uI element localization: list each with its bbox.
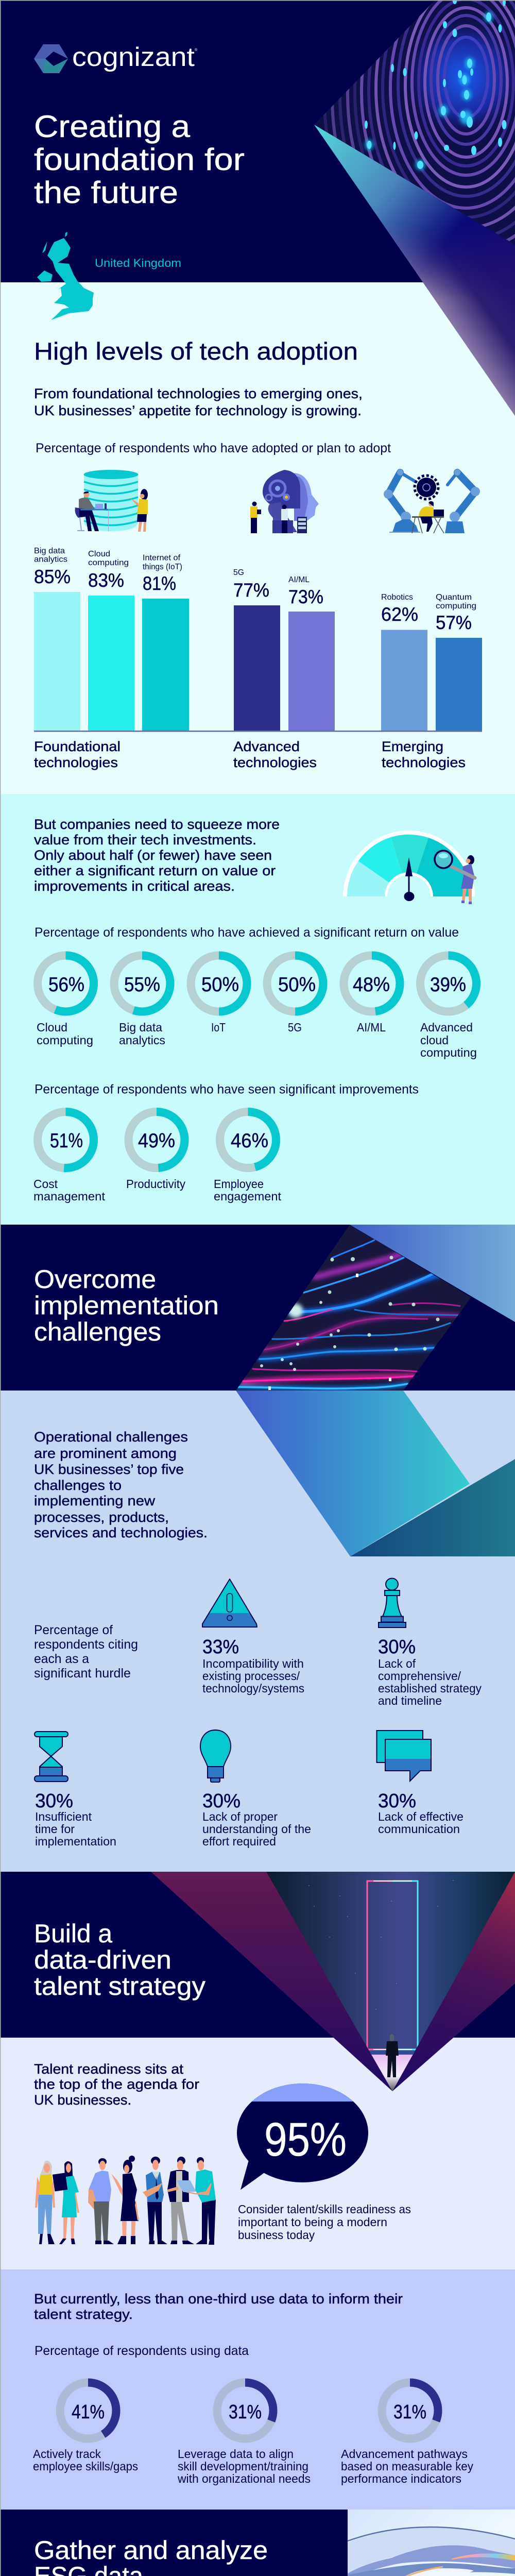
bar: internet of things (142, 553, 189, 731)
challenge: lack of strategy: established strategy (378, 1682, 482, 1695)
hero gradient wedge (314, 125, 515, 416)
text block: challenges intro: services and technologies. (34, 1525, 208, 1540)
shapes: upper blue wedge (350, 1225, 515, 1322)
person 5 (142, 2157, 167, 2244)
icon: robot arms and gear (384, 469, 480, 533)
person 7 (185, 2157, 216, 2245)
callout: 95% talent readiness (237, 2083, 411, 2242)
icon: AI head with robot arm (250, 470, 319, 533)
person 2 (53, 2161, 79, 2244)
challenge: communication: communication (378, 1822, 460, 1836)
bar: quantum computing: Quantum (436, 593, 472, 602)
bar: 5G (233, 568, 280, 731)
text block: value intro: either a significant return on value or (34, 863, 276, 878)
bar: big data analytics: analytics (34, 555, 67, 564)
donut: advanced cloud computing 39%: computing (420, 1046, 477, 1059)
challenge: understanding of effort (200, 1730, 311, 1848)
group labels (34, 739, 466, 770)
donut row: improvements (33, 1112, 282, 1203)
donut: track skills 41%: Actively track (33, 2447, 101, 2461)
donut: advanced cloud computing 39%: 39% (430, 974, 466, 996)
challenge: incompatibility: technology/systems (202, 1682, 304, 1695)
challenge: incompatibility: 33% (202, 1636, 239, 1658)
text block: value intro: But companies need to squeeze more (34, 817, 280, 832)
bar: internet of things: Internet of (143, 553, 181, 563)
logo: Cognizant (34, 42, 198, 73)
text block: talent readiness (34, 2061, 199, 2108)
hero image: swirl of glowing cables (309, 0, 515, 416)
text block: talent data intro: But currently, less than one-third use data to inform their (34, 2291, 403, 2307)
donut: track skills 41%: employee skills/gaps (33, 2460, 138, 2473)
shapes: talent wedge with neon doorway (151, 1872, 515, 2091)
heading: data-driven talent strategy (34, 1919, 205, 2001)
challenge: incompatibility: existing processes/ (202, 1669, 300, 1683)
woman with magnifier (435, 851, 475, 904)
bar: internet of things: 81% (143, 573, 176, 594)
challenge: insufficient time: 30% (35, 1790, 73, 1812)
text block: challenges intro (34, 1429, 208, 1540)
callout: 95% talent readiness: Consider talent/skills readiness as (238, 2202, 411, 2216)
challenge: insufficient time: Insufficient (35, 1810, 92, 1823)
heading: gather and analyze ESG data: Gather and analyze (34, 2536, 268, 2565)
donut: advancement pathways 31%: performance indicators (341, 2472, 461, 2485)
heading: overcome implementation challenges: implementation (34, 1291, 219, 1320)
donut: employee engagement 46%: Employee (214, 1177, 264, 1191)
donut: 5G 50% (267, 955, 323, 1034)
heading: data-driven talent strategy: Build a (34, 1919, 112, 1948)
bar: quantum computing (436, 593, 482, 731)
bar: cloud computing: Cloud (88, 550, 110, 558)
bar: robotics: 62% (381, 604, 418, 625)
challenge: understanding of effort: 30% (202, 1790, 241, 1812)
shapes: lower gradient chevron (236, 1391, 515, 1556)
donut: big data analytics 55%: 55% (124, 974, 160, 996)
donut: IoT 50% (191, 955, 247, 1034)
text block: challenges intro: implementing new (34, 1493, 156, 1509)
text block: talent readiness: Talent readiness sits at (34, 2061, 184, 2077)
icon: warning triangle (202, 1579, 257, 1627)
challenge: communication: Lack of effective (378, 1810, 464, 1823)
challenge: lack of strategy: comprehensive/ (378, 1669, 461, 1683)
person facing doorway (386, 2034, 399, 2077)
donut: big data analytics 55%: analytics (119, 1033, 165, 1047)
donut: 5G 50%: 5G (288, 1021, 302, 1034)
donut: 5G 50%: 50% (278, 974, 316, 996)
donut: cost management 51%: management (33, 1190, 106, 1203)
bar: big data analytics: Big data (34, 547, 65, 555)
title: Creating a (34, 109, 191, 144)
challenge: lack of strategy: 30% (378, 1636, 416, 1658)
bar: big data analytics (34, 547, 80, 731)
person 6 (167, 2157, 194, 2244)
logo: Cognizant: cognizant (72, 42, 195, 72)
text block: tech adoption intro: UK businesses’ appetite for technology is growing. (34, 403, 362, 418)
bar: internet of things: things (IoT) (143, 563, 182, 571)
donut: advanced cloud computing 39% (420, 955, 477, 1059)
text block: value intro: improvements in critical areas. (34, 878, 235, 894)
person 1 (35, 2161, 55, 2244)
donut: skill development 31%: with organizational needs (177, 2472, 311, 2485)
icon: chess pawn (379, 1579, 406, 1628)
text block: hurdle caption: respondents citing (34, 1637, 138, 1652)
bar: 5G: 5G (233, 568, 244, 577)
donut row: return on value (37, 955, 477, 1059)
text block: hurdle caption: each as a (34, 1652, 89, 1666)
panel: value background (0, 794, 515, 1225)
donut: advancement pathways 31%: 31% (393, 2401, 426, 2423)
challenge: communication (377, 1731, 464, 1836)
text block: challenges intro: UK businesses’ top five (34, 1462, 184, 1477)
panel: implementation header background (0, 1225, 515, 1391)
text block: value intro: value from their tech investments. (34, 832, 256, 848)
chart caption: Percentage of respondents who have adopted or plan to adopt (36, 441, 391, 455)
challenge: understanding of effort: understanding of the (202, 1822, 311, 1836)
text block: challenges intro: are prominent among (34, 1446, 177, 1461)
bar: big data analytics: 85% (34, 566, 71, 587)
donut: productivity 49%: 49% (138, 1130, 175, 1152)
donut: advancement pathways 31%: based on measurable key (341, 2460, 473, 2473)
bar: robotics (381, 593, 427, 731)
bar: cloud computing: computing (88, 558, 129, 567)
heading: gather and analyze ESG data (34, 2536, 268, 2576)
donut: cloud computing 56%: 56% (48, 974, 84, 996)
donut: advanced cloud computing 39%: cloud (420, 1033, 449, 1047)
bar: cloud computing (88, 550, 134, 731)
donut: IoT 50%: 50% (201, 974, 239, 996)
logo: Cognizant: ® (195, 48, 198, 52)
panel: challenges background (0, 1391, 515, 1872)
bar chart: technology adoption (34, 547, 482, 770)
donut: productivity 49% (126, 1112, 185, 1191)
bar: AI/ML: 73% (288, 586, 323, 607)
challenge: lack of strategy: Lack of (378, 1657, 416, 1670)
title: the future (34, 175, 178, 210)
panel: tech adoption background (0, 282, 515, 794)
donut: advancement pathways 31%: Advancement pathways (341, 2447, 468, 2461)
donut: AI/ML 48% (344, 955, 400, 1034)
callout: 95% talent readiness: important to being a modern (238, 2215, 387, 2229)
image: iridescent glass (348, 2510, 515, 2576)
group labels: Foundational (34, 739, 121, 754)
heading: data-driven talent strategy: talent strategy (34, 1972, 205, 2001)
donut row: use of talent data (33, 2382, 473, 2485)
donut: skill development 31%: skill development/training (178, 2460, 308, 2473)
donut: IoT 50%: IoT (211, 1021, 226, 1034)
chart caption: Percentage of respondents who have seen significant improvements (35, 1082, 419, 1096)
icon: UK map (37, 232, 94, 320)
challenge: incompatibility (202, 1579, 304, 1695)
icon: speech bubbles (377, 1731, 431, 1781)
text block: talent readiness: the top of the agenda for (34, 2076, 199, 2092)
donut: cost management 51% (33, 1112, 106, 1203)
donut: big data analytics 55%: Big data (119, 1021, 162, 1034)
panel: talent readiness background (0, 2038, 515, 2269)
group labels: technologies (233, 755, 317, 770)
donut: productivity 49%: Productivity (126, 1177, 185, 1191)
person 4 (111, 2156, 139, 2244)
donut: track skills 41%: 41% (72, 2401, 105, 2423)
text block: hurdle caption: significant hurdle (34, 1666, 131, 1681)
group labels: technologies (382, 755, 466, 770)
challenge: communication: 30% (378, 1790, 416, 1812)
challenge: understanding of effort: Lack of proper (202, 1810, 278, 1823)
panel: hero background (0, 0, 515, 282)
person 3 (88, 2158, 114, 2244)
donut: advancement pathways 31% (341, 2382, 473, 2485)
text block: challenges intro: processes, products, (34, 1510, 169, 1525)
donut: cost management 51%: Cost (33, 1177, 58, 1191)
donut: AI/ML 48%: 48% (353, 974, 390, 996)
bar: AI/ML (288, 575, 335, 731)
heading: tech adoption: High levels of tech adoption (34, 337, 358, 365)
chart caption: Percentage of respondents using data (35, 2344, 249, 2358)
title: foundation for (34, 142, 245, 177)
laptop (177, 2180, 196, 2192)
challenge: lack of strategy: and timeline (378, 1694, 442, 1707)
panel: ESG header background (0, 2510, 348, 2576)
challenge: insufficient time (35, 1732, 116, 1848)
chart caption: Percentage of respondents who have achieved a significant return on value (35, 925, 459, 940)
challenge: insufficient time: time for (35, 1822, 75, 1836)
heading: overcome implementation challenges: challenges (34, 1317, 161, 1346)
donut: track skills 41% (33, 2382, 138, 2473)
donut: skill development 31%: Leverage data to align (178, 2447, 294, 2461)
group labels: Advanced (233, 739, 300, 754)
group labels: technologies (34, 755, 118, 770)
donut: cloud computing 56%: computing (37, 1033, 93, 1047)
donut: employee engagement 46%: 46% (231, 1130, 268, 1152)
text block: challenges intro: challenges to (34, 1478, 122, 1493)
donut: skill development 31% (177, 2382, 311, 2485)
donut: skill development 31%: 31% (229, 2401, 262, 2423)
text block: value intro: Only about half (or fewer) have seen (34, 848, 272, 863)
text block: tech adoption intro: From foundational technologies to emerging ones, (34, 386, 363, 401)
title (34, 109, 245, 210)
text block: value intro (34, 817, 280, 894)
bar: quantum computing: 57% (436, 612, 472, 633)
heading: overcome implementation challenges (34, 1265, 219, 1346)
group labels: Emerging (382, 739, 443, 754)
donut: cloud computing 56%: Cloud (37, 1021, 67, 1034)
location label: United Kingdom (95, 257, 181, 269)
bar: cloud computing: 83% (88, 570, 124, 591)
icon: database with two people (75, 470, 148, 532)
donut: cost management 51%: 51% (50, 1130, 83, 1152)
donut: advanced cloud computing 39%: Advanced (420, 1021, 473, 1034)
challenge: incompatibility: Incompatibility with (202, 1657, 304, 1670)
text block: hurdle caption (34, 1623, 138, 1681)
callout: 95% talent readiness: 95% (264, 2113, 347, 2166)
icon: hexagon mark (34, 44, 68, 73)
panel: talent header background (0, 1872, 515, 2038)
illustration: group of seven colleagues (35, 2156, 216, 2245)
challenge: lack of strategy (378, 1579, 482, 1707)
donut: employee engagement 46%: engagement (214, 1190, 282, 1203)
text block: hurdle caption: Percentage of (34, 1623, 113, 1637)
text block: talent data intro (34, 2291, 403, 2322)
heading: overcome implementation challenges: Overcome (34, 1265, 156, 1294)
heading: data-driven talent strategy: data-driven (34, 1945, 171, 1974)
panel: talent data background (0, 2269, 515, 2510)
bar: quantum computing: computing (436, 602, 476, 611)
challenge: insufficient time: implementation (35, 1835, 116, 1848)
text block: talent readiness: UK businesses. (34, 2092, 131, 2108)
icon: gauge with magnifier (343, 831, 475, 904)
text block: talent data intro: talent strategy. (34, 2307, 133, 2322)
text block: challenges intro: Operational challenges (34, 1429, 188, 1445)
bar: 5G: 77% (233, 580, 269, 601)
donut: employee engagement 46% (214, 1112, 282, 1203)
callout: 95% talent readiness: business today (238, 2228, 315, 2242)
bar: AI/ML: AI/ML (288, 575, 310, 584)
bar: robotics: Robotics (381, 593, 413, 602)
icon: light bulb (200, 1730, 231, 1782)
donut: big data analytics 55% (114, 955, 170, 1047)
image: light streams (232, 1225, 474, 1391)
donut: cloud computing 56% (37, 955, 94, 1047)
challenge: understanding of effort: effort required (202, 1835, 276, 1848)
text block: tech adoption intro (34, 386, 363, 418)
donut: AI/ML 48%: AI/ML (357, 1021, 386, 1034)
icon: hourglass (35, 1732, 68, 1782)
